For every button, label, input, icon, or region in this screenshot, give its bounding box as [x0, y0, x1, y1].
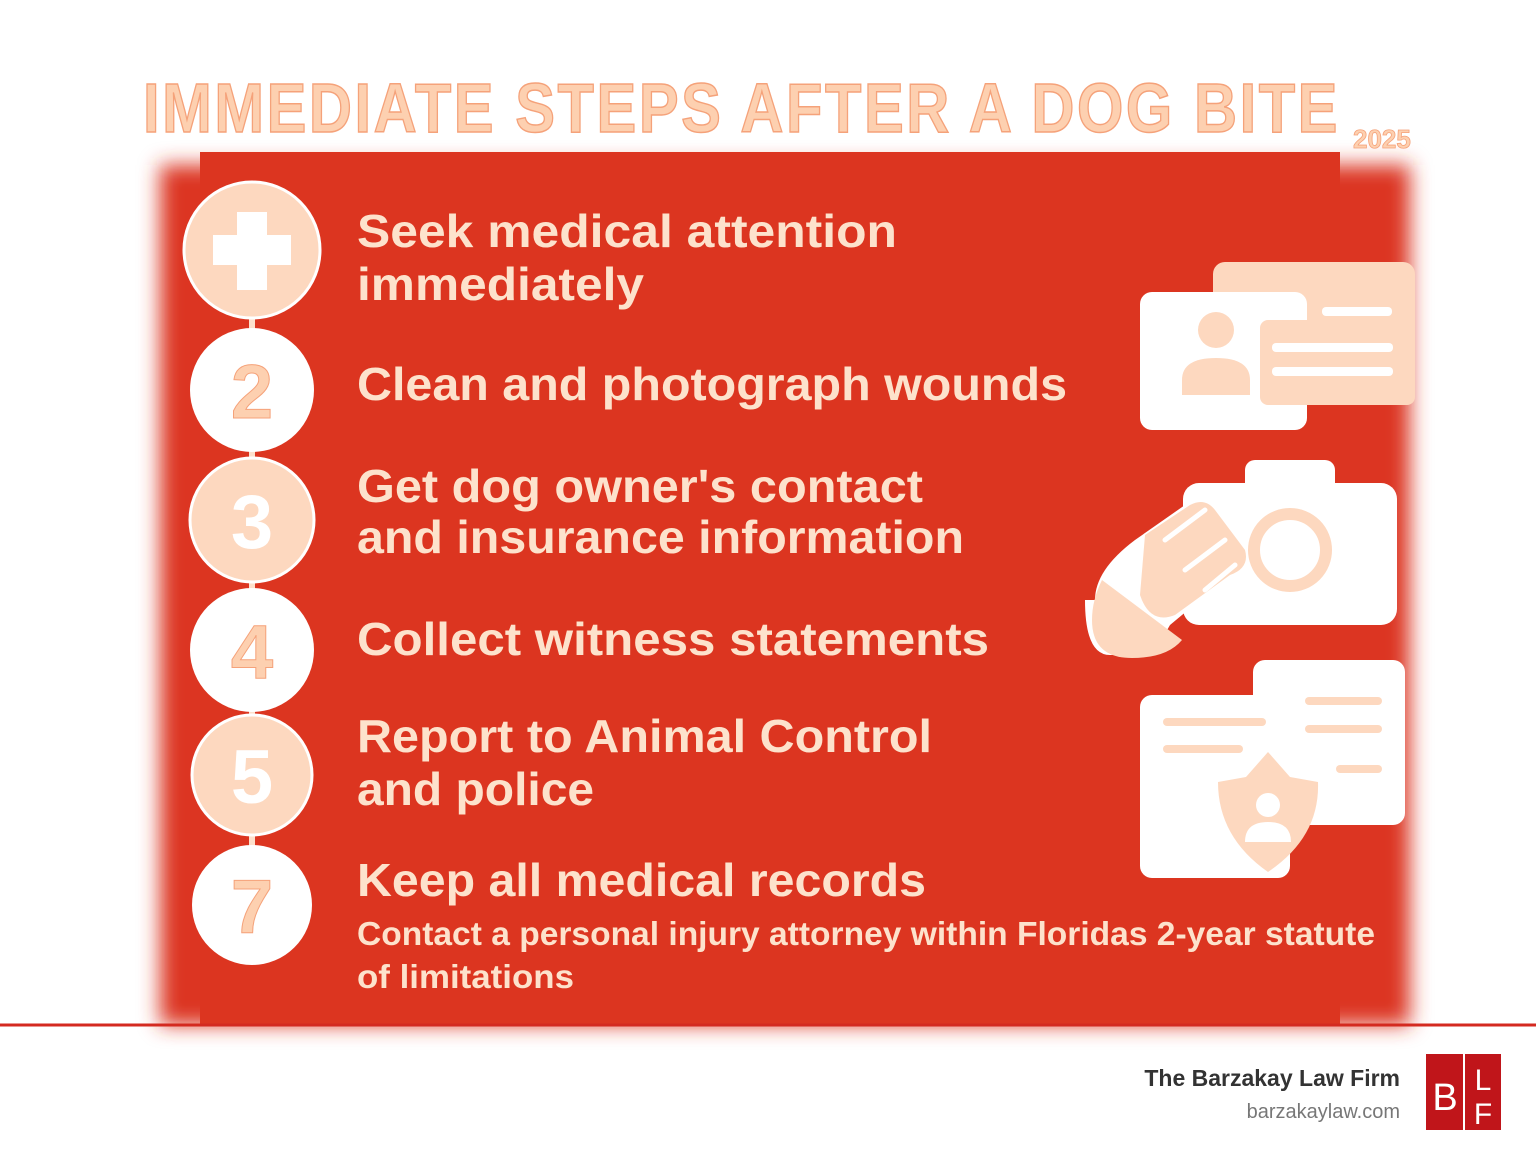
step 2 circle — [190, 328, 314, 452]
step 1 circle: medical cross — [184, 182, 320, 318]
step 7 circle — [192, 845, 312, 965]
step 5 circle: 5 — [231, 735, 273, 820]
footer: firm name: barzakaylaw.com — [1247, 1101, 1400, 1123]
footer: logo — [1426, 1054, 1501, 1131]
step 2 text: Clean and photograph wounds — [357, 358, 1067, 410]
footer: logo: L — [1475, 1064, 1491, 1097]
step 5 text: and police — [357, 763, 594, 815]
footer: firm name: The Barzakay Law Firm — [1144, 1065, 1400, 1091]
step 7 text: of limitations — [357, 958, 574, 995]
step 1 text: Seek medical attention — [357, 205, 897, 257]
step 7 circle: 7 — [231, 865, 273, 950]
step 2 circle: 2 — [231, 350, 273, 435]
footer divider — [0, 1024, 1536, 1026]
step 7 text — [357, 854, 1375, 995]
step 4 text: Collect witness statements — [357, 613, 989, 665]
footer: firm name — [1144, 1065, 1400, 1123]
step 3 text — [357, 460, 964, 563]
icon: ID cards — [1140, 262, 1415, 430]
icon: documents with shield — [1140, 660, 1405, 878]
step 7 text: Keep all medical records — [357, 854, 926, 906]
footer: logo: B — [1432, 1077, 1458, 1119]
step 1 text — [357, 205, 897, 310]
footer: logo: F — [1474, 1098, 1492, 1131]
timeline connector — [249, 300, 255, 870]
step 5 text — [357, 710, 932, 815]
step 7 text: Contact a personal injury attorney within Floridas 2-year statute — [357, 915, 1375, 952]
icon: camera with hand — [1085, 460, 1397, 658]
step 3 circle: 3 — [231, 480, 273, 565]
step 5 text: Report to Animal Control — [357, 710, 932, 762]
title: 2025 — [1353, 124, 1411, 154]
step 4 circle — [190, 588, 314, 712]
red panel — [160, 152, 1410, 1025]
step 5 circle — [192, 715, 312, 835]
step 3 text: and insurance information — [357, 511, 964, 563]
title: IMMEDIATE STEPS AFTER A DOG BITE — [143, 69, 1340, 147]
step 4 circle: 4 — [231, 610, 273, 695]
step 3 circle — [190, 458, 314, 582]
step texts — [357, 205, 1375, 995]
step 1 text: immediately — [357, 258, 644, 310]
step 3 text: Get dog owner's contact — [357, 460, 923, 512]
